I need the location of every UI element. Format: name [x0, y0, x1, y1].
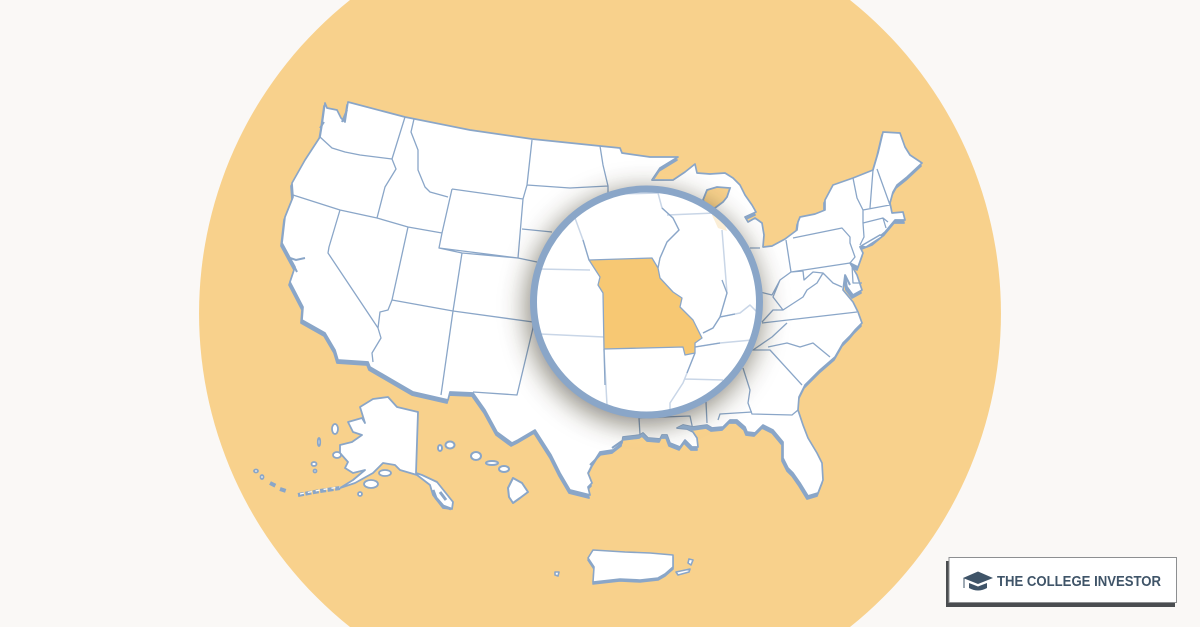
small islands [555, 559, 693, 576]
pale lake patch [712, 214, 727, 231]
map: contiguous United States [282, 102, 922, 496]
brand name: THE COLLEGE INVESTOR [997, 574, 1161, 590]
Northwest islet [438, 445, 442, 451]
lens background [534, 189, 760, 415]
background circle [199, 0, 1001, 627]
Maui [499, 466, 509, 472]
badge shadow [946, 561, 1175, 607]
lens contents [538, 193, 757, 412]
badge box [949, 558, 1176, 602]
coast details [287, 110, 851, 465]
shadow of magnifier on the map [528, 192, 760, 424]
Alaska mainland [340, 397, 453, 509]
Big Island [508, 478, 528, 503]
neighbouring state borders [538, 193, 757, 412]
Kauai [471, 452, 481, 460]
icon: graduation cap [963, 572, 993, 590]
state borders [293, 117, 890, 435]
map: Alaska [254, 397, 453, 509]
state: Missouri [589, 258, 702, 355]
small islands [254, 424, 391, 496]
lens ring [534, 189, 760, 415]
faint shadow on the background [528, 192, 760, 424]
Aleutian highlights [300, 487, 340, 494]
darker neighbour borders [583, 208, 735, 385]
main island [588, 550, 673, 582]
Long Island [861, 235, 883, 247]
map: Hawaii [438, 442, 528, 503]
logo badge [946, 558, 1176, 607]
map: Puerto Rico [555, 550, 693, 582]
panhandle islands [433, 490, 451, 509]
magnifier: zoomed Missouri [534, 189, 760, 415]
Northwest island [446, 442, 454, 448]
Lake Michigan [703, 187, 730, 208]
mainland outline [282, 102, 922, 496]
Aleutian islands [270, 483, 340, 495]
Oahu and Molokai [486, 461, 498, 465]
